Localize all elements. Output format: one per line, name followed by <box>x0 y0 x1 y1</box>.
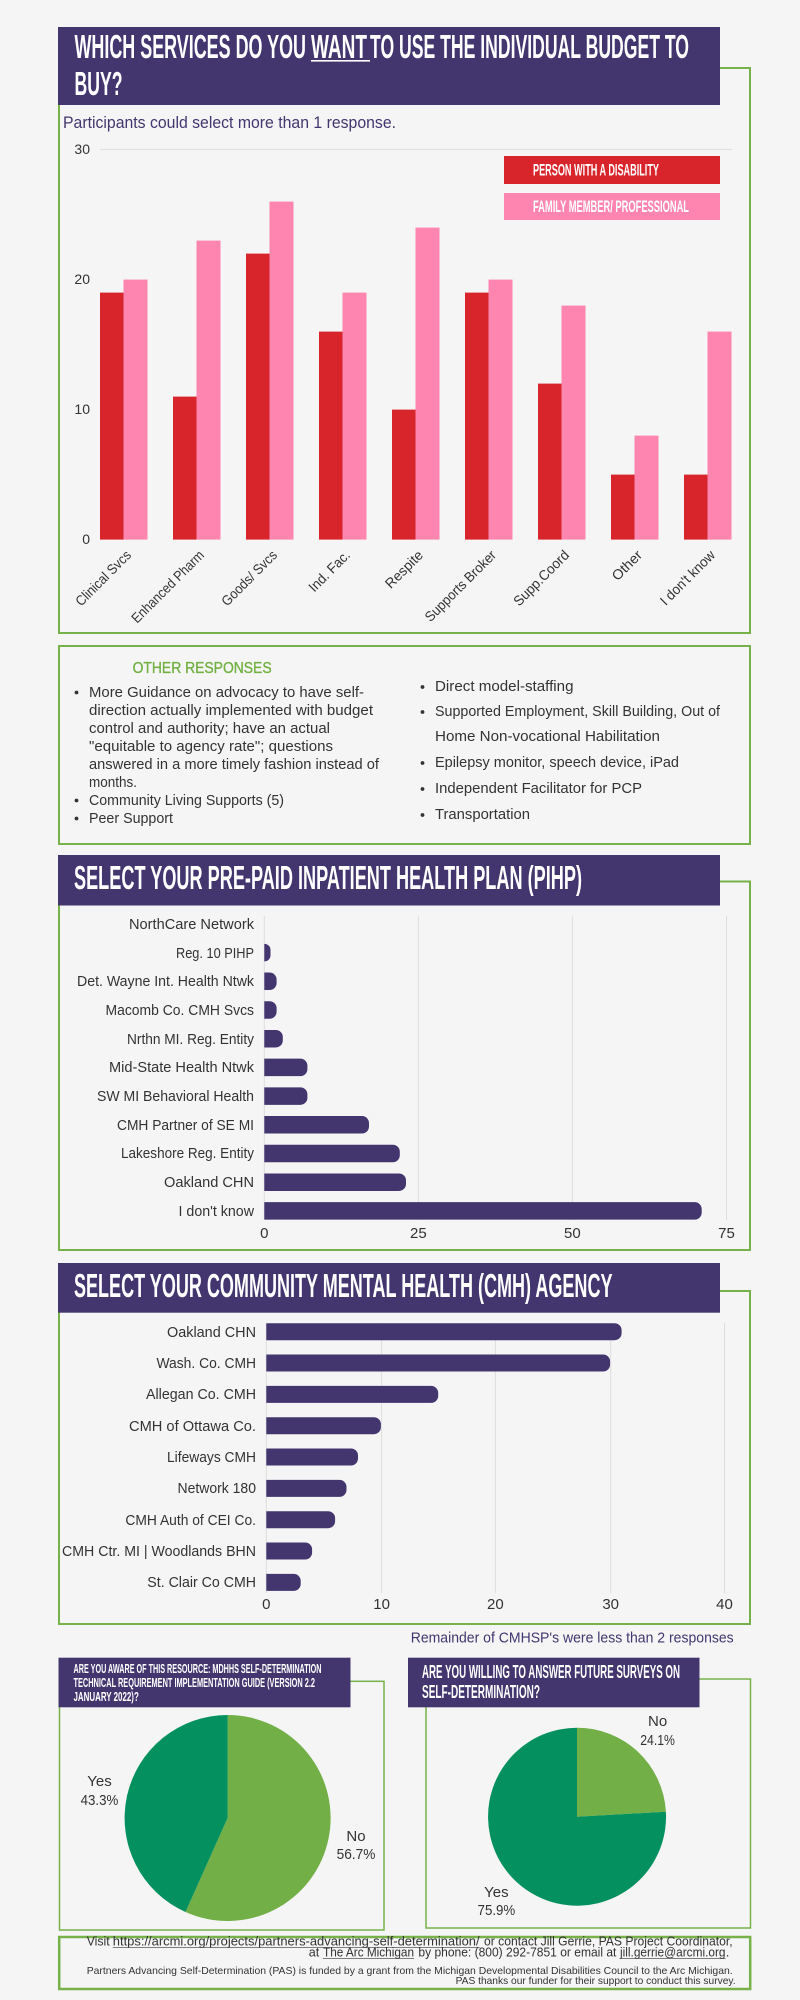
contact text: by phone: (800) 292-7851 or email at <box>418 1945 617 1960</box>
left list: control and authority; have an actual <box>89 720 330 737</box>
bar chart: CMH responses: 10 <box>373 1596 390 1613</box>
right list: Independent Facilitator for PCP <box>435 780 642 797</box>
funding text: Partners Advancing Self-Determination (PAS) is funded by a grant from the Michigan Developmental Disabilities Council to the Arc Michigan. <box>87 1965 733 1977</box>
heading: future surveys <box>408 1658 700 1707</box>
heading: which services: WANT <box>311 28 367 65</box>
left list: direction actually implemented with budget <box>89 702 374 719</box>
contact text: or contact Jill Gerrie, PAS Project Coordinator, <box>484 1934 733 1949</box>
pie chart: future surveys: 75.9% <box>478 1902 515 1919</box>
bar chart: services by respondent type: Respite <box>382 547 426 591</box>
bar chart: CMH responses: 20 <box>487 1596 504 1613</box>
bar chart: CMH responses: CMH Auth of CEI Co. <box>125 1512 256 1529</box>
funding text <box>87 1965 736 1987</box>
pie chart: future surveys <box>478 1713 675 1919</box>
legend: person with a disability <box>504 156 720 184</box>
right list: Direct model-staffing <box>435 678 574 695</box>
left list <box>75 684 380 827</box>
bar chart: PIHP responses: 0 <box>260 1225 268 1242</box>
bar chart: services by respondent type: 0 <box>82 531 90 547</box>
pie chart: resource awareness: No <box>346 1828 366 1845</box>
bar chart: PIHP responses <box>77 916 735 1242</box>
panel: CMH agency <box>58 1263 750 1624</box>
left list: Peer Support <box>89 810 174 827</box>
panel: PIHP <box>58 855 750 1250</box>
bar chart: CMH responses: Wash. Co. CMH <box>156 1355 256 1372</box>
bar chart: CMH responses <box>62 1323 733 1613</box>
right list: Home Non-vocational Habilitation <box>435 728 660 745</box>
bar chart: services by respondent type: Clinical Svcs <box>72 547 134 609</box>
bar chart: services by respondent type: Goods/ Svcs <box>218 547 280 609</box>
bar chart: services by respondent type: Other <box>608 547 645 584</box>
heading: PIHP <box>58 855 720 906</box>
panel: future surveys <box>408 1658 750 1928</box>
pie chart: future surveys: Yes <box>484 1884 509 1901</box>
left list: months. <box>89 774 137 791</box>
bar chart: PIHP responses: Lakeshore Reg. Entity <box>121 1145 254 1162</box>
bar chart: CMH responses: Network 180 <box>178 1480 256 1497</box>
heading: other responses: OTHER RESPONSES <box>133 660 272 677</box>
funding text: PAS thanks our funder for their support to conduct this survey. <box>456 1975 736 1987</box>
legend: family member or professional <box>504 193 720 220</box>
pie chart: resource awareness: Yes <box>87 1773 112 1790</box>
bar chart: CMH responses: Oakland CHN <box>167 1324 256 1341</box>
bar chart: CMH responses: CMH Ctr. MI | Woodlands BHN <box>62 1543 256 1560</box>
contact text <box>87 1934 733 1960</box>
bar chart: services by respondent type: Supp.Coord <box>510 547 572 609</box>
panel: resource awareness <box>58 1658 384 1930</box>
right list: Transportation <box>435 806 530 823</box>
bar chart: PIHP responses: I don't know <box>178 1203 254 1220</box>
heading: resource awareness: ARE YOU AWARE OF THIS RESOURCE: MDHHS SELF-DETERMINATION <box>74 1661 322 1676</box>
right list <box>421 678 721 823</box>
pie chart: resource awareness <box>81 1715 375 1921</box>
bar chart: services by respondent type: Enhanced Pharm <box>128 547 207 626</box>
bar chart: PIHP responses: CMH Partner of SE MI <box>117 1117 254 1134</box>
pie chart: resource awareness: 56.7% <box>337 1846 375 1863</box>
contact text: Visit <box>87 1934 110 1949</box>
bar chart: CMH responses: 40 <box>716 1596 733 1613</box>
heading: resource awareness: TECHNICAL REQUIREMENT IMPLEMENTATION GUIDE (VERSION 2.2 <box>74 1675 315 1690</box>
heading: which services: WHICH SERVICES DO YOU <box>74 28 306 65</box>
bar chart: PIHP responses: Det. Wayne Int. Health Ntwk <box>77 973 254 990</box>
bar chart: services by respondent type <box>72 141 732 626</box>
bar chart: PIHP responses: Mid-State Health Ntwk <box>109 1059 254 1076</box>
bar chart: PIHP responses: Oakland CHN <box>164 1174 254 1191</box>
legend: person with a disability: PERSON WITH A DISABILITY <box>533 160 659 180</box>
left list: More Guidance on advocacy to have self- <box>89 684 364 701</box>
bar chart: services by respondent type: 10 <box>74 401 90 417</box>
note: multiple responses: Participants could select more than 1 response. <box>63 113 396 132</box>
pie chart: future surveys: 24.1% <box>640 1732 675 1749</box>
bar chart: PIHP responses: 75 <box>718 1225 735 1242</box>
bar chart: CMH responses: St. Clair Co CMH <box>147 1574 256 1591</box>
note: remainder of CMHSPs: Remainder of CMHSP's were less than 2 responses <box>411 1630 734 1647</box>
bar chart: PIHP responses: SW MI Behavioral Health <box>97 1088 254 1105</box>
heading: resource awareness: JANUARY 2022)? <box>74 1689 139 1704</box>
bar chart: CMH responses: CMH of Ottawa Co. <box>129 1418 256 1435</box>
panel: other responses <box>59 646 750 844</box>
bar chart: services by respondent type: I don't know <box>657 546 719 608</box>
contact text: . <box>726 1945 729 1960</box>
bar chart: PIHP responses: 25 <box>410 1225 427 1242</box>
bar chart: PIHP responses: Macomb Co. CMH Svcs <box>106 1002 254 1019</box>
panel: services wanted <box>58 27 750 633</box>
pie chart: future surveys: No <box>648 1713 667 1730</box>
left list: answered in a more timely fashion instead of <box>89 756 380 773</box>
bar chart: PIHP responses: Nrthn MI. Reg. Entity <box>127 1031 254 1048</box>
contact text: The Arc Michigan <box>323 1945 414 1960</box>
heading: CMH agency <box>58 1263 720 1313</box>
heading: which services: BUY? <box>74 65 122 102</box>
bar chart: services by respondent type: Supports Broker <box>421 547 499 625</box>
bar chart: CMH responses: 30 <box>602 1596 619 1613</box>
bar chart: services by respondent type: Ind. Fac. <box>305 547 353 595</box>
contact text: https://arcmi.org/projects/partners-advancing-self-determination/ <box>113 1934 480 1949</box>
right list: Supported Employment, Skill Building, Out of <box>435 703 721 720</box>
contact text: at <box>309 1945 320 1960</box>
bar chart: CMH responses: 0 <box>262 1596 270 1613</box>
left list: "equitable to agency rate"; questions <box>89 738 333 755</box>
contact text: jill.gerrie@arcmi.org <box>619 1945 726 1960</box>
bar chart: services by respondent type: 20 <box>74 271 90 287</box>
panel: contact and funding footer <box>59 1934 750 1989</box>
heading: future surveys: SELF-DETERMINATION? <box>422 1681 540 1702</box>
left list: Community Living Supports (5) <box>89 792 284 809</box>
right list: Epilepsy monitor, speech device, iPad <box>435 754 679 771</box>
bar chart: PIHP responses: Reg. 10 PIHP <box>176 945 254 962</box>
bar chart: services by respondent type: 30 <box>74 141 90 157</box>
bar chart: CMH responses: Allegan Co. CMH <box>146 1386 256 1403</box>
bar chart: PIHP responses: 50 <box>564 1225 581 1242</box>
pie chart: resource awareness: 43.3% <box>81 1792 118 1809</box>
heading: resource awareness <box>58 1658 350 1707</box>
bar chart: PIHP responses: NorthCare Network <box>129 916 254 933</box>
heading: which services <box>58 27 720 105</box>
bar chart: CMH responses: Lifeways CMH <box>167 1449 256 1466</box>
